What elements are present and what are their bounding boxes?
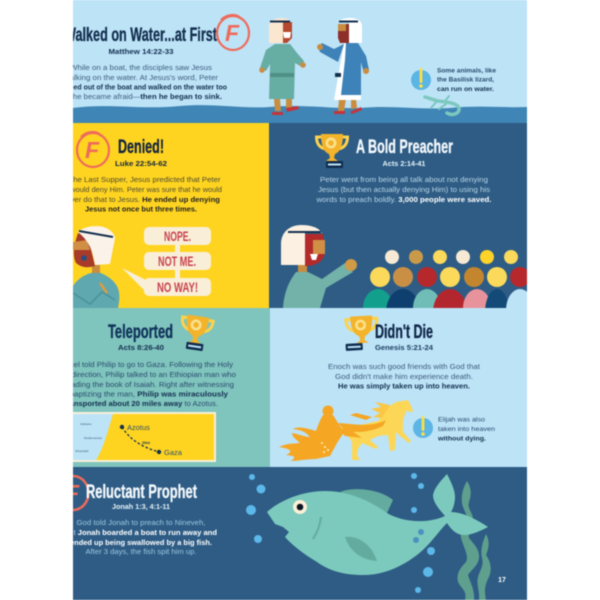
- icon: fail stamp: F: [225, 20, 240, 46]
- text block: Jesus (but then actually denying Him) to using his: [318, 187, 491, 194]
- text block: was reading the book of Isaiah. Right after witnessing: [47, 382, 234, 389]
- callout: basilisk lizard: can run on water.: [437, 86, 494, 93]
- figure: Peter: [259, 18, 306, 115]
- heading: Denied!: [118, 137, 164, 158]
- text block: An angel told Philip to go to Gaza. Following the Holy: [49, 362, 234, 369]
- illustration: seaweed: [457, 481, 491, 600]
- heading: Didn't Die: [375, 322, 433, 343]
- reference: Jonah 1:3, 4:1-11: [112, 502, 170, 511]
- panel: didn't die: [270, 308, 527, 467]
- crowd: [362, 249, 528, 309]
- icon: trophy: [178, 314, 214, 352]
- text block: he would deny Him. Peter was sure that he would: [60, 187, 222, 194]
- map: [73, 412, 216, 462]
- speech bubbles: [122, 227, 211, 296]
- icon: fail stamp: [58, 476, 88, 510]
- text block: After 3 days, the fish spit him up.: [86, 549, 197, 556]
- figure: Jesus: [317, 18, 369, 114]
- text block: While on a boat, the disciples saw Jesus: [70, 65, 213, 72]
- map: Shephelah: [75, 449, 89, 453]
- icon: fail stamp: F: [85, 137, 100, 163]
- reference: Genesis 5:21-24: [375, 343, 434, 352]
- panel: a bold preacher: [268, 122, 528, 309]
- callout: basilisk lizard: the Basilisk lizard,: [437, 76, 494, 84]
- icon: fail stamp: [77, 132, 109, 167]
- bubble: not me: NOT ME.: [158, 254, 196, 269]
- text block: [60, 177, 222, 214]
- panel: teleported: [72, 307, 271, 468]
- text block: words to preach boldly. 3,000 people were saved.: [315, 197, 492, 204]
- icon: fail stamp: [217, 15, 249, 50]
- text block: ended up being swallowed by a big fish.: [70, 540, 212, 547]
- callout: elijah: [413, 416, 495, 442]
- reference: Matthew 14:22-33: [108, 47, 174, 56]
- heading: Teleported: [108, 322, 173, 343]
- text block: God didn't make him experience death.: [335, 374, 473, 381]
- map: Gaza: [164, 448, 183, 457]
- bubbles: [246, 473, 435, 593]
- callout: elijah: taken into heaven: [438, 426, 495, 433]
- heading: Reluctant Prophet: [86, 482, 197, 503]
- text block: but he became afraid— then he began to sink.: [60, 94, 222, 101]
- map: Mediterranean: [84, 436, 102, 440]
- callout: basilisk lizard: Some animals, like: [437, 68, 496, 74]
- map: Ashkelon: [80, 422, 92, 426]
- text block: stepped out of the boat and walked on the water too: [55, 84, 227, 92]
- icon: trophy: [344, 315, 378, 351]
- text block: He was simply taken up into heaven.: [338, 384, 470, 390]
- text block: [328, 364, 480, 390]
- text block: [72, 361, 236, 408]
- heading: Walked on Water...at First: [64, 25, 217, 46]
- text block: [65, 520, 217, 556]
- reference: Acts 2:14-41: [382, 159, 426, 168]
- page number: 17: [498, 577, 506, 584]
- text block: [315, 177, 492, 204]
- text block: Jesus not once but three times.: [85, 206, 197, 214]
- text block: transported about 20 miles away to Azotus.: [64, 401, 218, 408]
- text block: Spirit's direction, Philip talked to an Ethiopian man who: [46, 372, 236, 379]
- callout: elijah: without dying.: [437, 436, 486, 442]
- illustration: fiery horse: [338, 400, 413, 460]
- illustration: flaming chariot: [279, 406, 362, 461]
- icon: fail stamp: F: [65, 480, 80, 506]
- callout: basilisk lizard: [411, 68, 496, 93]
- water: [73, 105, 527, 123]
- panel: reluctant prophet: [58, 467, 527, 600]
- text block: but Jonah boarded a boat to run away and: [65, 530, 217, 537]
- text block: and baptizing the man, Philip was miraculously: [54, 392, 228, 398]
- callout: elijah: Elijah was also: [438, 416, 485, 424]
- bubble: no way: NO WAY!: [157, 280, 198, 295]
- map: 20mi: [142, 441, 150, 445]
- panel: walked on water: [55, 0, 527, 123]
- text block: Enoch was such good friends with God that: [328, 364, 480, 371]
- illustration: fish: [267, 474, 488, 575]
- icon: lizard: [425, 96, 459, 114]
- text block: At the Last Supper, Jesus predicted that Peter: [62, 177, 221, 184]
- icon: trophy: [316, 134, 348, 168]
- panel: denied: [60, 123, 269, 308]
- text block: never do that to Jesus. He ended up denying: [62, 197, 220, 204]
- reference: Acts 8:26-40: [118, 343, 164, 352]
- bubble: nope: NOPE.: [164, 229, 191, 244]
- figure: Peter arms crossed: [73, 226, 119, 308]
- text block: walking on the water. At Jesus's word, Peter: [63, 75, 219, 82]
- text block: [55, 65, 227, 101]
- map: Azotus: [127, 423, 150, 432]
- text block: God told Jonah to preach to Nineveh,: [76, 520, 206, 527]
- figure: preacher Peter: [281, 225, 357, 308]
- text block: Peter went from being all talk about not denying: [320, 177, 488, 184]
- heading: A Bold Preacher: [356, 137, 453, 158]
- reference: Luke 22:54-62: [115, 159, 167, 168]
